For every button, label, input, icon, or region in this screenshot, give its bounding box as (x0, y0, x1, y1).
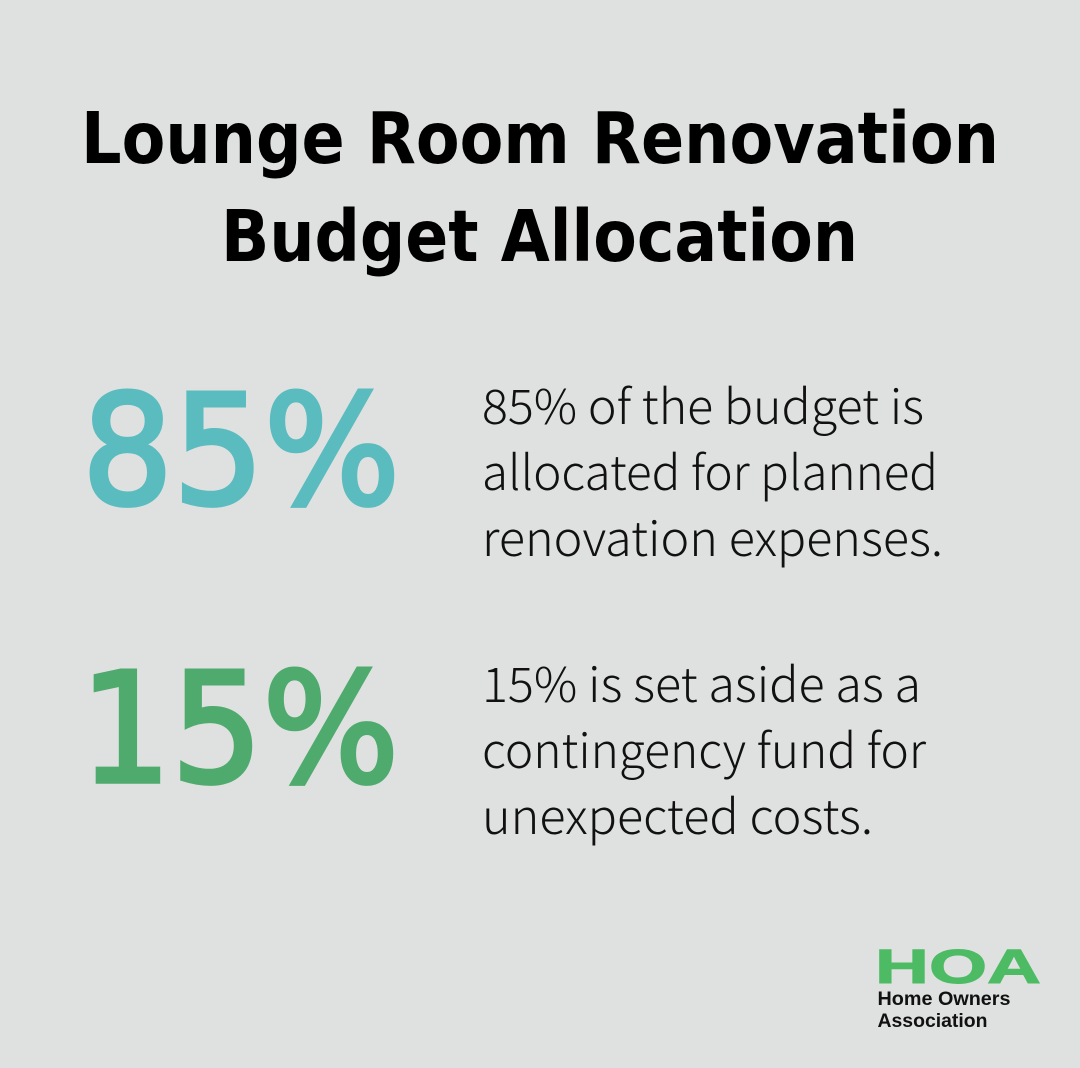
text block: contingency fund: contingency fund for (482, 712, 927, 782)
stat: 15 percent: 15% (80, 640, 399, 818)
title: Budget Allocation (221, 195, 858, 278)
text block: planned expenses: renovation expenses. (482, 500, 943, 570)
title: Lounge Room Renovation (81, 97, 999, 180)
logo: Home Owners Association: Association (878, 1011, 988, 1032)
logo: Home Owners Association: HOA (875, 941, 1041, 994)
text block: contingency fund (482, 646, 927, 848)
text block: planned expenses: allocated for planned (482, 434, 938, 504)
text block: contingency fund: 15% is set aside as a (482, 646, 921, 716)
text block: planned expenses (482, 368, 943, 570)
logo: Home Owners Association (875, 941, 1041, 1032)
title (81, 97, 999, 278)
text block: planned expenses: 85% of the budget is (482, 368, 924, 438)
stat: 85 percent: 85% (82, 362, 400, 540)
text block: contingency fund: unexpected costs. (482, 778, 873, 848)
logo: Home Owners Association: Home Owners (878, 989, 1010, 1010)
